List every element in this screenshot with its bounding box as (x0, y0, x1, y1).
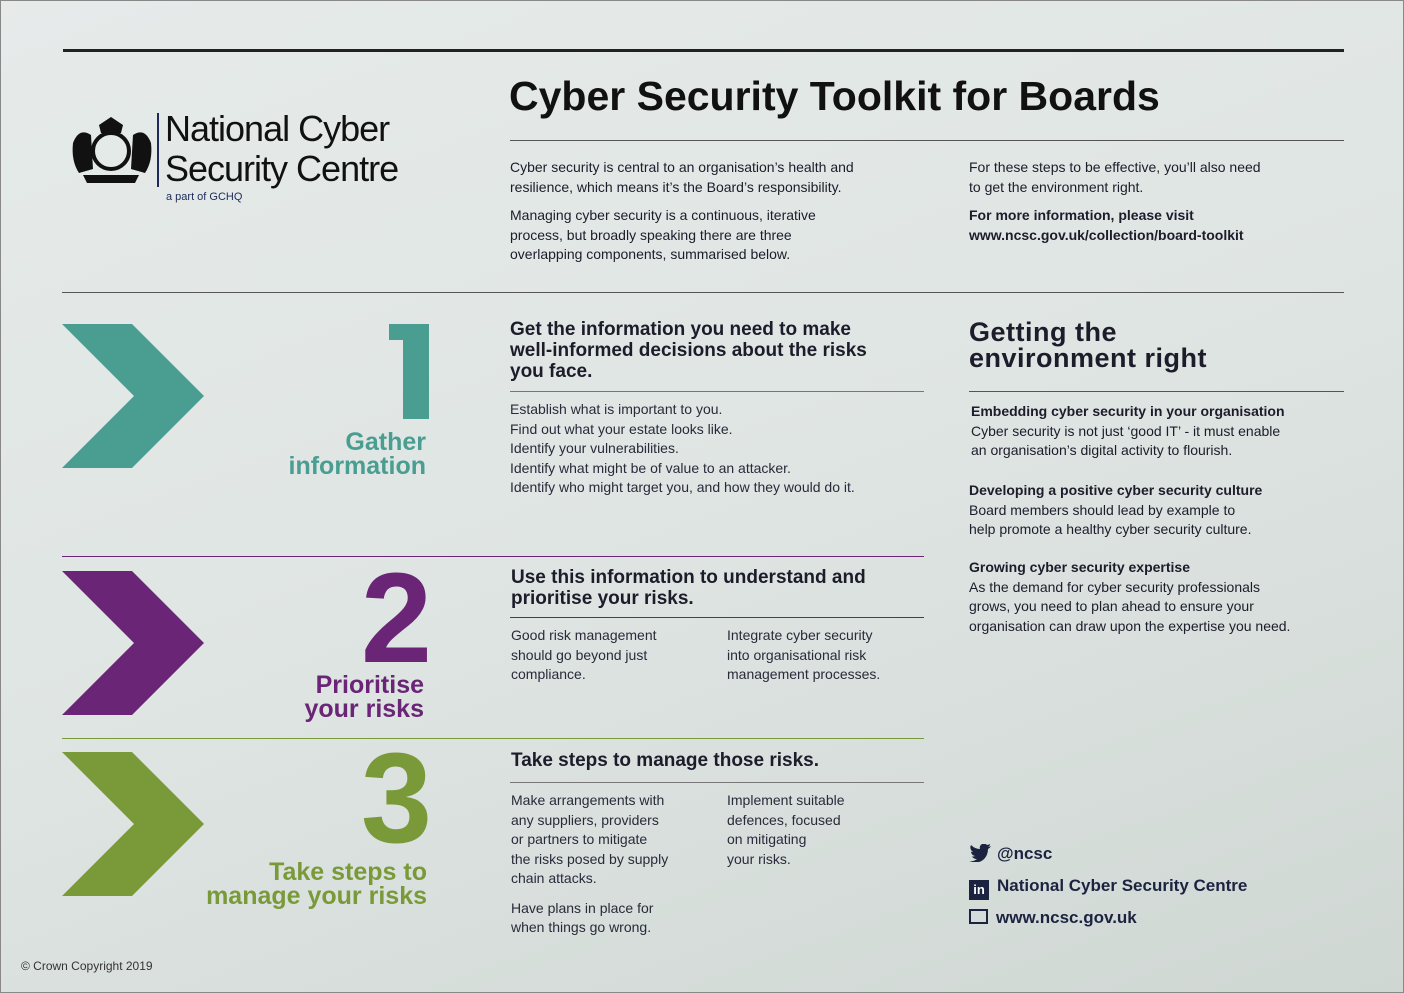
step 2 (62, 547, 924, 723)
social links (969, 844, 1247, 927)
list (510, 401, 855, 495)
text cols (511, 792, 668, 935)
logo: a part of GCHQ (166, 191, 242, 203)
label: take steps: Take steps to (269, 858, 427, 886)
intro right: to get the environment right. For more information, please visit (969, 178, 1194, 223)
linkedin: National Cyber Security Centre (997, 876, 1247, 895)
text cols: chain attacks. Have plans in place for (511, 870, 653, 916)
heading (969, 317, 1207, 373)
item 1: an organisation’s digital activity to flourish. (971, 442, 1232, 458)
step 3: on mitigating (727, 831, 806, 847)
label: take steps (206, 858, 427, 910)
heading: environment right (969, 343, 1207, 373)
item 2: help promote a healthy cyber security culture. (969, 521, 1251, 537)
item 3: Growing cyber security expertise (969, 559, 1190, 575)
text: NCSC name (165, 108, 398, 189)
text cols: Make arrangements with (511, 792, 664, 808)
intro right: www.ncsc.gov.uk/collection/board-toolkit (969, 226, 1244, 242)
heading: Use this information to understand and prioritise your risks. (511, 567, 866, 609)
step 3: defences, focused (727, 812, 841, 828)
label: prioritise: your risks (304, 695, 424, 723)
text cols (511, 627, 657, 682)
item 3: As the demand for cyber security professionals (969, 578, 1260, 594)
number 2: 2 (361, 547, 432, 690)
text cols: should go beyond just (511, 646, 647, 662)
item 1: Embedding cyber security in your organisation (971, 403, 1285, 419)
icon: purple chevron (62, 571, 204, 715)
label: gather: Gather (345, 428, 426, 456)
label: prioritise: Prioritise (316, 671, 424, 699)
step 2: Integrate cyber security (727, 627, 873, 643)
label: take steps: manage your risks (206, 882, 427, 910)
item 1: Cyber security is not just ‘good IT’ - it must enable (971, 422, 1280, 438)
icon: crest (72, 117, 152, 183)
text: NCSC name: Security Centre (165, 148, 398, 189)
heading: Get the information you need to make well-informed decisions about the risks you face. (510, 319, 867, 382)
text cols: Good risk management (511, 627, 657, 643)
text cols: compliance. (511, 666, 586, 682)
text cols: or partners to mitigate (511, 831, 647, 847)
heading: Getting the (969, 317, 1117, 347)
copyright: © Crown Copyright 2019 (21, 959, 153, 973)
step 3: your risks. (727, 850, 791, 866)
text cols: any suppliers, providers (511, 812, 659, 828)
text cols: when things go wrong. (511, 919, 651, 935)
number 1 (389, 324, 429, 419)
heading: Take steps to manage those risks. (511, 750, 819, 771)
item 3: grows, you need to plan ahead to ensure your (969, 598, 1254, 614)
twitter (969, 844, 1052, 863)
web: www.ncsc.gov.uk (996, 908, 1137, 927)
list: Identify your vulnerabilities. (510, 440, 679, 456)
item 3: organisation can draw upon the expertise you need. (969, 618, 1290, 634)
panel: environment (969, 317, 1344, 634)
list: Establish what is important to you. (510, 401, 722, 417)
item 2: Board members should lead by example to (969, 502, 1235, 518)
icon: teal chevron (62, 324, 204, 468)
list: Find out what your estate looks like. (510, 420, 733, 436)
list: Identify who might target you, and how they would do it. (510, 479, 855, 495)
item 1 (971, 403, 1285, 458)
step 1 (62, 319, 924, 495)
intro text: overlapping components, summarised below. (510, 246, 790, 262)
item 3 (969, 559, 1290, 634)
item 2: Developing a positive cyber security culture (969, 482, 1262, 498)
linkedin: in (973, 882, 985, 897)
intro text: resilience, which means it’s the Board’s responsibility. Managing cyber security is a continuous, iterative (510, 178, 842, 223)
number 3: 3 (361, 727, 432, 870)
item 2 (969, 482, 1262, 537)
intro right: For these steps to be effective, you’ll also need (969, 159, 1261, 175)
step 3 (62, 727, 924, 935)
intro right (969, 159, 1261, 243)
step 3: Implement suitable (727, 792, 845, 808)
step 2: management processes. (727, 666, 880, 682)
intro text (510, 159, 854, 262)
logo (72, 108, 398, 203)
intro text: Cyber security is central to an organisation’s health and (510, 159, 854, 175)
step 2: into organisational risk (727, 646, 866, 662)
icon: green chevron (62, 752, 204, 896)
label: gather: information (288, 452, 426, 480)
label: gather (288, 428, 426, 480)
list: Identify what might be of value to an attacker. (510, 460, 791, 476)
text cols: the risks posed by supply (511, 850, 668, 866)
title: Cyber Security Toolkit for Boards (509, 73, 1160, 119)
twitter: @ncsc (997, 844, 1052, 863)
label: prioritise (304, 671, 424, 723)
intro text: process, but broadly speaking there are three (510, 226, 792, 242)
text: NCSC name: National Cyber (165, 108, 389, 149)
